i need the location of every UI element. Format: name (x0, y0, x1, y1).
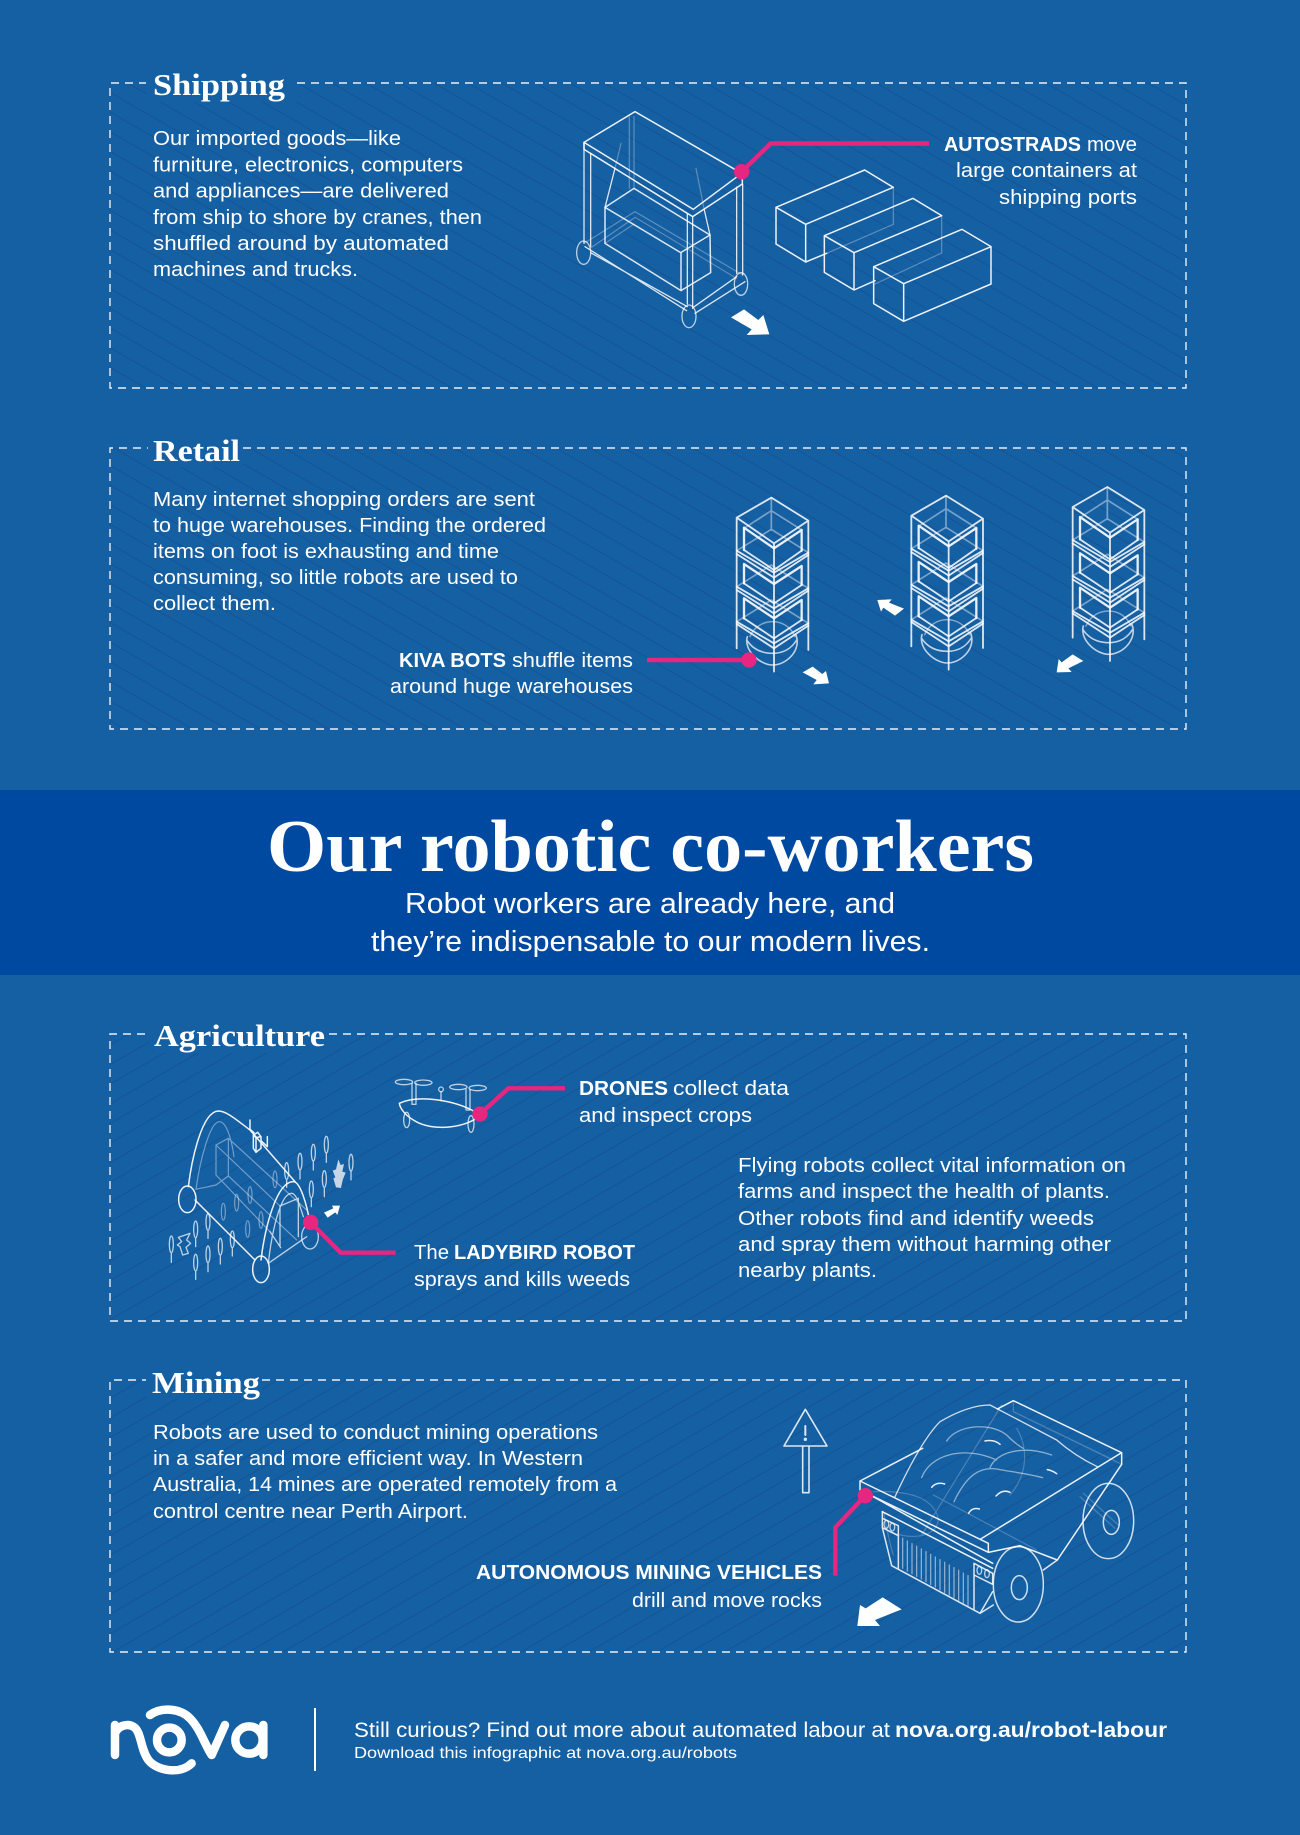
text block: mining body: control centre near Perth Airport. (153, 1500, 468, 1523)
text block: retail body: collect them. (153, 592, 276, 615)
arrow: kiva two (877, 599, 904, 616)
arrow: kiva three (1057, 654, 1083, 672)
callout: kiva bots: shuffle items (512, 649, 633, 672)
icon: warning sign (784, 1409, 827, 1493)
text block: shipping body: Our imported goods—like (153, 127, 401, 150)
callout: ladybird robot: LADYBIRD ROBOT (454, 1241, 635, 1264)
callout: drones: collect data (673, 1077, 790, 1100)
text block: agriculture body: Other robots find and identify weeds (738, 1207, 1094, 1230)
text block: mining body (153, 1421, 618, 1523)
panel: retail (110, 433, 1186, 729)
text block: retail body: to huge warehouses. Finding the ordered (153, 514, 546, 537)
callout line: drones (472, 1088, 565, 1122)
text block: retail body (153, 488, 546, 615)
callout: autonomous mining vehicles: AUTONOMOUS MINING VEHICLES (476, 1561, 822, 1584)
text block: retail body: Many internet shopping orders are sent (153, 488, 535, 511)
text block: shipping body: machines and trucks. (153, 258, 358, 281)
heading: mining: Mining (152, 1365, 261, 1400)
callout line: kiva bots (647, 652, 757, 668)
callout: autostrads (944, 133, 1137, 209)
arrow: mining vehicle direction (857, 1597, 902, 1626)
callout: kiva bots: KIVA BOTS (399, 649, 506, 672)
text block: mining body: in a safer and more efficient way. In Western (153, 1447, 583, 1470)
text block: shipping body: shuffled around by automated (153, 232, 449, 255)
text block: agriculture body: Flying robots collect vital information on (738, 1154, 1126, 1177)
divider (314, 1708, 316, 1771)
text block: shipping body (153, 127, 482, 281)
callout: autonomous mining vehicles: drill and move rocks (632, 1589, 822, 1612)
callout: drones (579, 1077, 790, 1127)
icon: crop plants (169, 1136, 353, 1279)
subtitle: Robot workers are already here, and (405, 888, 895, 920)
text block: agriculture body: nearby plants. (738, 1259, 877, 1282)
text block: mining body: Robots are used to conduct mining operations (153, 1421, 598, 1444)
callout: ladybird robot: The (414, 1241, 449, 1264)
text block: retail body: consuming, so little robots are used to (153, 566, 518, 589)
text block: mining body: Australia, 14 mines are operated remotely from a (153, 1473, 618, 1496)
callout: autostrads: shipping ports (999, 186, 1137, 209)
text block: shipping body: and appliances—are delivered (153, 180, 449, 202)
callout: drones: DRONES (579, 1077, 668, 1100)
callout: autostrads: move (1087, 133, 1137, 156)
arrow: ladybird direction (324, 1206, 340, 1218)
callout: kiva bots (390, 649, 633, 698)
icon: ladybird robot (179, 1111, 318, 1283)
text block: agriculture body: and spray them without harming other (738, 1233, 1111, 1256)
callout: ladybird robot (414, 1241, 635, 1291)
text block: shipping body: furniture, electronics, computers (153, 154, 463, 176)
icon: kiva bot two (911, 496, 983, 670)
text block: retail body: items on foot is exhausting and time (153, 540, 499, 563)
arrow: autostrad direction (731, 309, 769, 335)
text block: agriculture body: farms and inspect the health of plants. (738, 1180, 1110, 1203)
heading: agriculture: Agriculture (154, 1018, 325, 1053)
callout: autostrads: AUTOSTRADS (944, 133, 1081, 156)
footer (115, 1708, 1167, 1771)
subtitle (371, 888, 930, 958)
icon: kiva bot three (1073, 487, 1144, 661)
text block: agriculture body (738, 1154, 1126, 1282)
icon: shipping containers (776, 170, 991, 321)
panel: agriculture (110, 1018, 1186, 1321)
footer text: nova.org.au/robot-labour (895, 1719, 1167, 1742)
heading: retail: Retail (153, 433, 240, 468)
callout: autostrads: large containers at (956, 159, 1137, 182)
callout line: autostrads (734, 144, 929, 179)
icon: autostrad vehicle (577, 112, 748, 328)
text block: shipping body: from ship to shore by cranes, then (153, 206, 482, 229)
footer text: Download this infographic at nova.org.au/robots (354, 1745, 737, 1762)
callout: autonomous mining vehicles (476, 1561, 822, 1612)
arrow: kiva one (803, 667, 829, 684)
panel: shipping (110, 67, 1186, 388)
callout: kiva bots: around huge warehouses (390, 675, 633, 698)
title: Our robotic co-workers (267, 806, 1034, 888)
footer text (354, 1719, 1167, 1762)
heading: shipping: Shipping (153, 67, 286, 102)
icon: autonomous mining vehicle (860, 1401, 1134, 1622)
callout line: ladybird robot (303, 1215, 396, 1253)
footer text: Still curious? Find out more about automated labour at (354, 1719, 890, 1742)
icon: drone (395, 1079, 486, 1132)
callout: ladybird robot: sprays and kills weeds (414, 1268, 630, 1291)
callout line: mining vehicles (835, 1488, 873, 1576)
banner (0, 790, 1300, 975)
logo: nova (115, 1710, 263, 1770)
callout: drones: and inspect crops (579, 1104, 752, 1127)
subtitle: they’re indispensable to our modern lives. (371, 926, 930, 958)
panel: mining (110, 1365, 1186, 1652)
icon: kiva bot one (737, 498, 808, 672)
